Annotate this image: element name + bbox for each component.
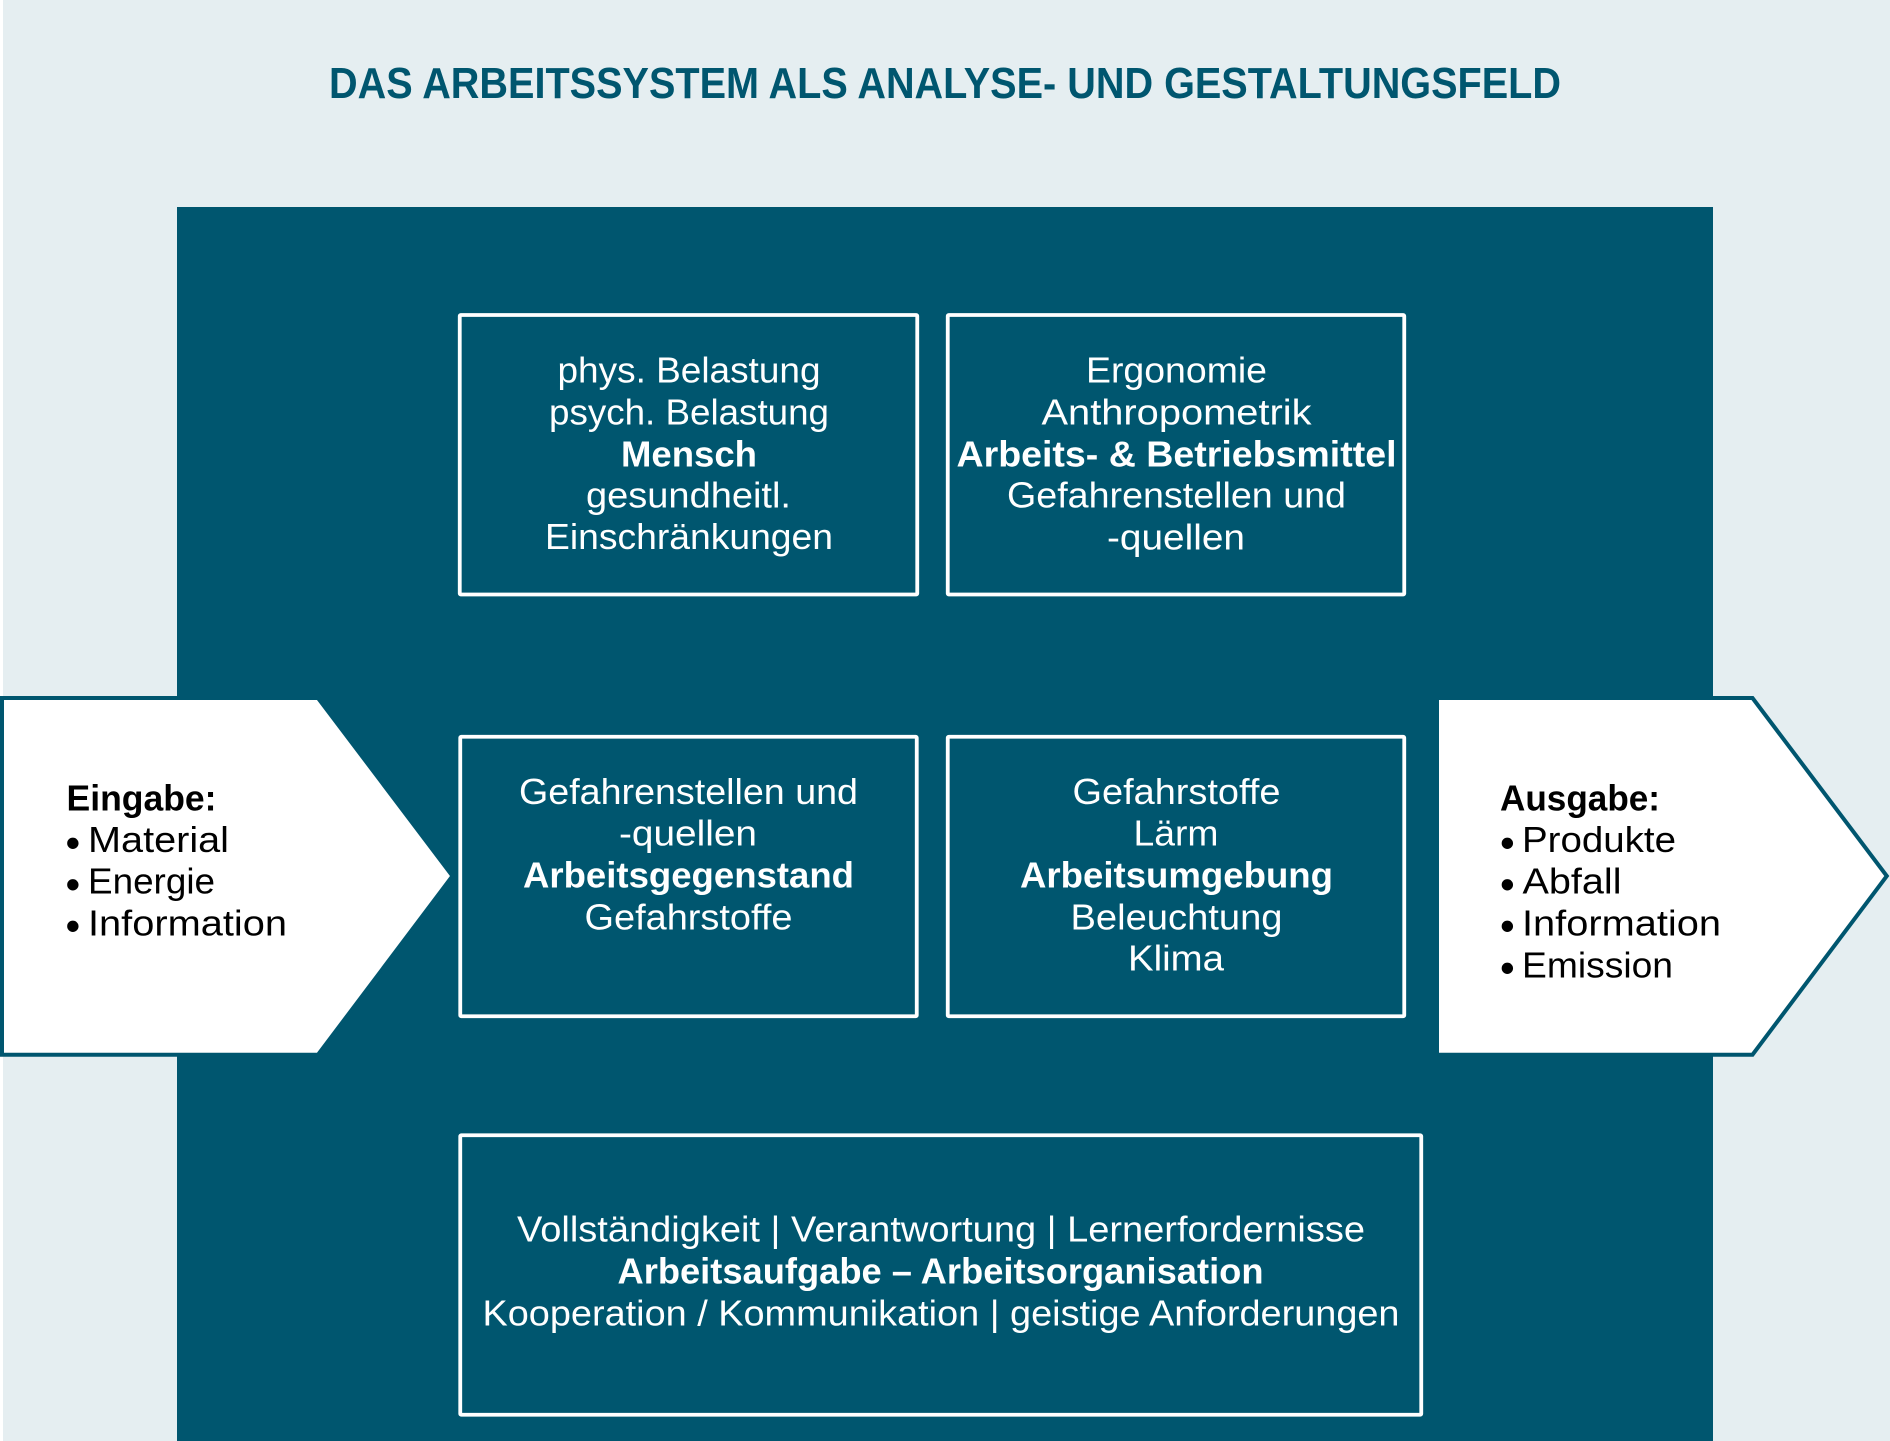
arrow: Ausgabe: •: [1500, 860, 1515, 908]
arrow: Ausgabe: [1437, 698, 1887, 1055]
panel: Arbeitsumgebung: Klima: [1128, 938, 1225, 978]
arrow: Ausgabe: •: [1500, 944, 1515, 991]
panel: Mensch: [460, 315, 917, 594]
arrow: Ausgabe: •: [1500, 819, 1515, 866]
panel: Arbeitsaufgabe und Arbeitsorganisation: Kooperation / Kommunikation | geistige Anforderungen: [482, 1292, 1400, 1334]
title: DAS ARBEITSSYSTEM ALS ANALYSE- UND GESTALTUNGSFELD: [329, 59, 1561, 108]
panel: Arbeitsumgebung: Arbeitsumgebung: [1020, 854, 1333, 895]
panel: Arbeits- und Betriebsmittel: Anthropometrik: [1042, 392, 1313, 432]
arrow: Ausgabe: Abfall: [1522, 860, 1622, 902]
panel: Arbeitsgegenstand: Gefahrstoffe: [584, 896, 792, 938]
arrow: Ausgabe: Emission: [1522, 944, 1673, 986]
arrow: Ausgabe: Produkte: [1522, 819, 1676, 860]
panel: Arbeitsgegenstand: Arbeitsgegenstand: [523, 854, 854, 895]
panel: Arbeits- und Betriebsmittel: Arbeits- & Betriebsmittel: [956, 434, 1396, 474]
panel: Arbeitsaufgabe und Arbeitsorganisation: Arbeitsaufgabe – Arbeitsorganisation: [618, 1250, 1264, 1291]
panel: Mensch: psych. Belastung: [549, 392, 829, 432]
arrow: Eingabe: Material: [88, 819, 229, 860]
arrow: Eingabe: Energie: [88, 860, 215, 902]
panel: Arbeits- und Betriebsmittel: -quellen: [1107, 516, 1245, 558]
arrow: Ausgabe: •: [1500, 902, 1515, 949]
panel: Arbeits- und Betriebsmittel: Ergonomie: [1086, 350, 1267, 390]
arrow: Eingabe: •: [66, 819, 80, 866]
panel: Mensch: gesundheitl.: [586, 474, 791, 516]
panel: Arbeitsumgebung: Beleuchtung: [1070, 896, 1282, 938]
arrow: Eingabe: •: [66, 902, 80, 949]
panel: Mensch: phys. Belastung: [558, 350, 820, 390]
panel: Arbeitsgegenstand: Gefahrenstellen und: [519, 771, 858, 812]
panel: Arbeitsgegenstand: [460, 737, 917, 1016]
arrow: Eingabe: •: [66, 860, 80, 908]
panel: Arbeits- und Betriebsmittel: [948, 315, 1404, 594]
panel: Arbeitsgegenstand: -quellen: [619, 813, 757, 854]
panel: Arbeits- und Betriebsmittel: Gefahrenstellen und: [1007, 474, 1346, 516]
panel: Mensch: Einschränkungen: [545, 516, 833, 557]
panel: Arbeitsaufgabe und Arbeitsorganisation: [460, 1135, 1421, 1415]
arrow: Eingabe: [2, 698, 452, 1055]
arrow: Eingabe: Eingabe:: [66, 778, 216, 819]
arrow: Ausgabe: Information: [1522, 902, 1721, 944]
panel: Arbeitsumgebung: [948, 737, 1404, 1016]
arrow: Eingabe: Information: [88, 902, 287, 944]
panel: Arbeitsaufgabe und Arbeitsorganisation: Vollständigkeit | Verantwortung | Lernerfordernisse: [517, 1209, 1365, 1250]
arrow: Ausgabe: Ausgabe:: [1500, 778, 1660, 819]
panel: Arbeitsumgebung: Gefahrstoffe: [1072, 771, 1280, 812]
panel: work system: [177, 207, 1713, 1441]
panel: Arbeitsumgebung: Lärm: [1134, 813, 1218, 854]
panel: Mensch: Mensch: [621, 434, 757, 474]
